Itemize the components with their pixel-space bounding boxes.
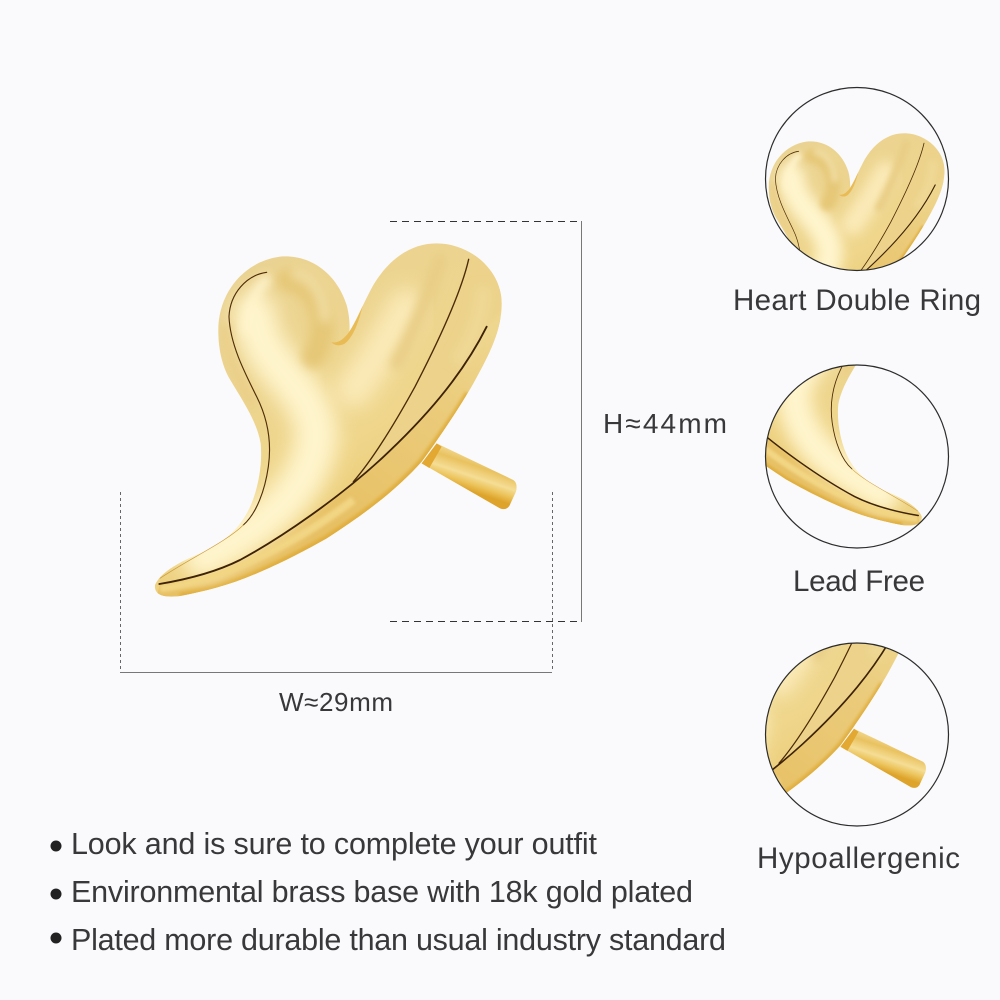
width dimension line [120, 492, 552, 672]
detail circle: hypoallergenic [764, 642, 950, 827]
caption: lead free: Lead Free [793, 565, 925, 598]
detail circle: heart double ring [764, 86, 950, 272]
caption: heart double ring: Heart Double Ring [733, 284, 981, 317]
caption: hypoallergenic: Hypoallergenic [757, 842, 960, 875]
height dimension line [390, 221, 582, 622]
bullet 2: Environmental brass base with 18k gold plated [71, 875, 693, 909]
width label: W≈29mm [279, 687, 393, 717]
feature list [50, 827, 726, 957]
main product image: heart earring [155, 243, 517, 603]
height label: H≈44mm [603, 408, 727, 439]
detail circle: lead free [764, 364, 950, 549]
bullet 1: Look and is sure to complete your outfit [71, 827, 598, 861]
bullet 3: Plated more durable than usual industry standard [71, 923, 726, 957]
